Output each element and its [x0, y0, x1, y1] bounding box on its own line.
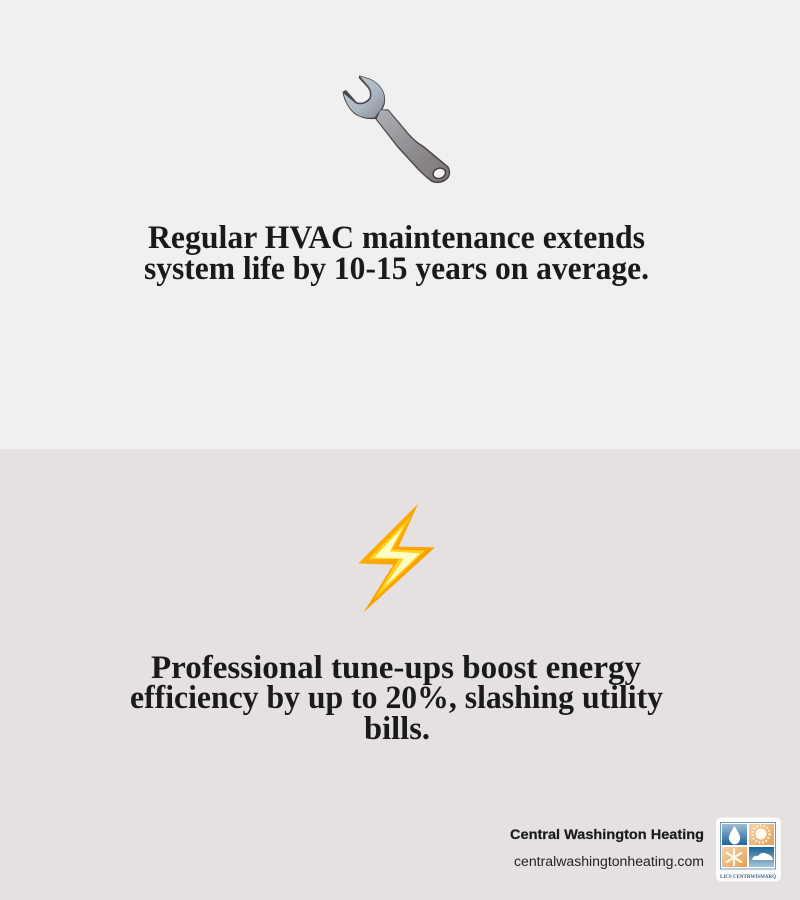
panel: system life [0, 0, 800, 449]
heading: energy efficiency: Professional tune-ups boost energy [151, 650, 641, 686]
heading: system life: Regular HVAC maintenance extends [148, 220, 645, 256]
panel: energy efficiency [0, 449, 800, 900]
heading: energy efficiency: efficiency by up to 20%, slashing utility [130, 680, 663, 716]
heading: system life: system life by 10-15 years on average. [144, 251, 649, 287]
logo tile: snowflake [722, 847, 747, 867]
heading: energy efficiency: bills. [364, 711, 430, 747]
heading: system life [144, 220, 649, 287]
logo tile: water drop [722, 824, 747, 845]
brand: website: centralwashingtonheating.com [514, 854, 704, 869]
icon: lightning bolt [358, 504, 435, 613]
logo caption: LICS CENTRWISMARQ [720, 874, 777, 880]
icon: wrench [343, 75, 450, 183]
brand: company name: Central Washington Heating [510, 826, 704, 842]
logo tile: sun [749, 824, 774, 845]
heading: energy efficiency [130, 650, 663, 747]
logo tile: cloud [749, 847, 774, 867]
logo [716, 818, 781, 882]
